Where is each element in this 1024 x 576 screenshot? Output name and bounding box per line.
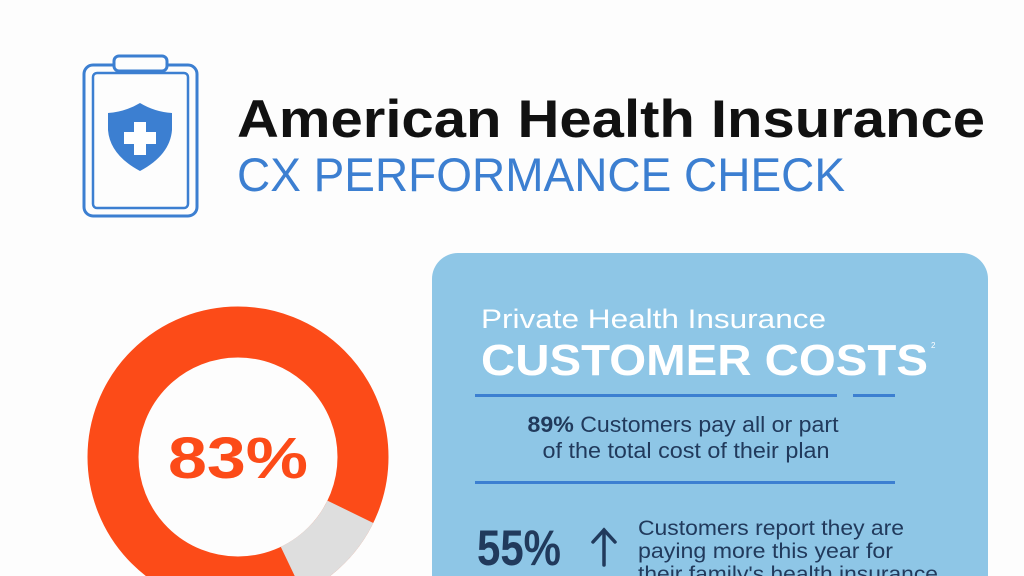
panel: customer costs: [432, 253, 988, 576]
icon: clipboard with shield: [84, 56, 197, 216]
panel heading: Private Health Insurance: [481, 304, 826, 334]
donut chart: 83%: [71, 290, 405, 576]
subtitle: CX PERFORMANCE CHECK: [237, 148, 845, 201]
title: American Health Insurance: [237, 90, 985, 149]
donut chart: 83%: 83%: [168, 426, 308, 491]
icon: up arrow: [593, 530, 615, 565]
stat: 55%: Customers report they are: [638, 517, 904, 540]
stat: 89%: [528, 412, 838, 463]
stat: 55%: [477, 517, 938, 576]
stat: 55%: paying more this year for: [638, 540, 893, 563]
stat: 89%: 89% Customers pay all or part: [528, 412, 838, 437]
panel heading: CUSTOMER COSTS: [481, 336, 928, 385]
panel heading: [481, 304, 936, 385]
stat: 89%: of the total cost of their plan: [542, 438, 830, 463]
stat: 55%: 55%: [477, 520, 561, 576]
panel heading: 2: [931, 341, 936, 350]
